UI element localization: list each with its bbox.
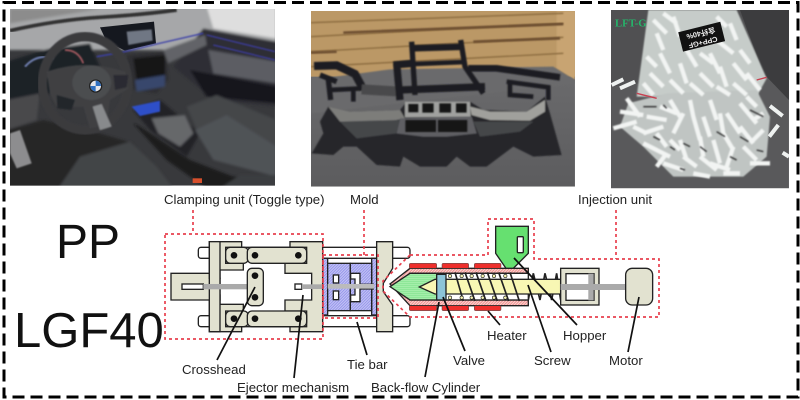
spring (528, 273, 561, 300)
rear platen and ram (209, 242, 243, 332)
leader lines (217, 258, 639, 378)
label: hopper: Hopper (563, 328, 607, 343)
label: valve: Valve (453, 353, 485, 368)
pins (231, 252, 302, 322)
label: heater: Heater (487, 328, 527, 343)
toggle links (226, 247, 307, 327)
dotted outline: clamping unit (165, 210, 323, 339)
label: ejector mechanism: Ejector mechanism (237, 380, 349, 395)
dotted outline: mold (323, 210, 378, 318)
label: mold: Mold (350, 192, 379, 207)
hydraulic box (561, 268, 599, 305)
moving platen (285, 242, 323, 332)
motor (626, 268, 653, 305)
heading: PP: PP (56, 216, 120, 269)
label: crosshead: Crosshead (182, 362, 246, 377)
tie bars (198, 247, 410, 327)
bag label: 含纤40% (685, 25, 716, 41)
bag label (678, 22, 725, 52)
photo: car interior (7, 7, 277, 188)
label: injection unit: Injection unit (578, 192, 652, 207)
label: clamping unit: Clamping unit (Toggle type) (164, 192, 325, 207)
photo: dashboard carrier part (311, 11, 575, 187)
diagram: injection unit (390, 226, 653, 311)
hopper (496, 226, 528, 268)
valve (437, 274, 446, 300)
cylinder (390, 268, 528, 306)
bag label: CPP+GF (687, 34, 718, 50)
label: motor: Motor (609, 353, 643, 368)
upper black frame (314, 65, 363, 89)
label: screw: Screw (534, 353, 571, 368)
screw (419, 279, 561, 294)
pellets (448, 274, 507, 299)
label: back-flow cylinder: Back-flow Cylinder (371, 380, 481, 395)
lower moulding (312, 97, 562, 167)
photo: LGF pellets in bag (611, 10, 789, 188)
stationary platen (377, 242, 393, 332)
heaters (409, 263, 501, 311)
LFT-G logo: LFT-G (615, 19, 647, 30)
mold (323, 258, 377, 315)
heading: LGF40: LGF40 (14, 304, 164, 358)
dotted outline: injection unit (383, 210, 659, 317)
diagram: clamping unit and mold (171, 242, 410, 332)
label: tie bar: Tie bar (347, 357, 388, 372)
